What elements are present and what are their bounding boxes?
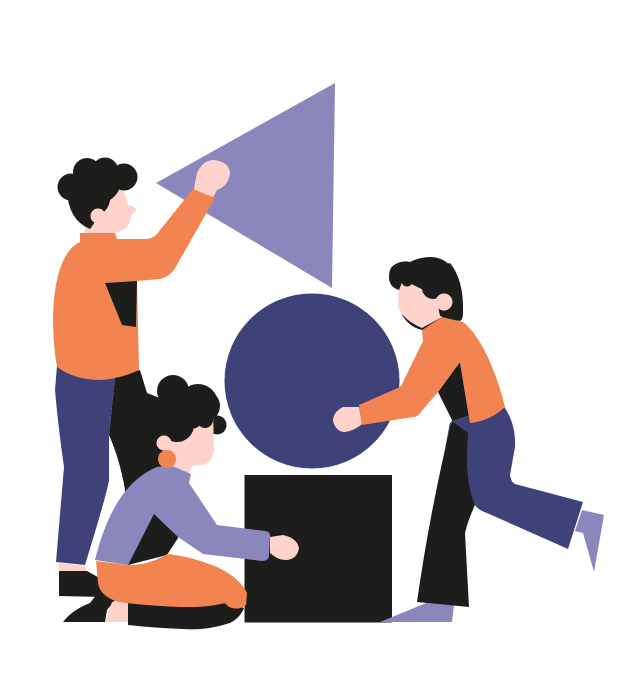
kneeling woman: black lower leg [128, 603, 244, 629]
kneeling woman: hand [270, 535, 299, 560]
man: neck and face [84, 183, 136, 240]
shape: navy circle [224, 294, 400, 468]
man: navy leg [55, 366, 115, 565]
running woman: ear [436, 294, 452, 310]
running woman: face [398, 270, 445, 328]
kneeling woman: hair [156, 375, 220, 442]
kneeling woman: back shoe [63, 590, 115, 622]
man: hand [194, 160, 230, 198]
man: ear [90, 208, 106, 224]
kneeling woman: orange skirt [96, 554, 247, 609]
kneeling woman: far hair [208, 416, 226, 434]
shape: purple triangle [156, 83, 335, 288]
running woman: orange sweater [359, 317, 505, 425]
person: running woman [333, 257, 604, 622]
running woman: back shoe [575, 510, 604, 572]
kneeling woman: foot [105, 602, 128, 622]
man: gap under arm [105, 281, 137, 327]
person: kneeling woman [63, 375, 299, 629]
man: ankle [59, 563, 87, 572]
kneeling woman: face [163, 410, 214, 474]
shape: black square [244, 475, 392, 622]
person: standing man [53, 158, 230, 597]
running woman: navy back leg [452, 400, 583, 549]
running woman: hair [389, 257, 463, 321]
running woman: black back hair [402, 263, 463, 330]
kneeling woman: ear [156, 436, 172, 450]
running woman: hand [333, 407, 362, 432]
running woman: navy sliver [417, 422, 456, 602]
man: orange sweater [53, 189, 215, 380]
man: black leg [109, 370, 178, 565]
running woman: black front leg [417, 420, 475, 607]
man: hair [58, 158, 138, 229]
running woman: black torso [438, 362, 470, 423]
kneeling woman: purple sweater [95, 465, 270, 565]
man: back shoe [59, 571, 103, 597]
running woman: front shoe [380, 603, 454, 622]
kneeling woman: earring [158, 450, 176, 468]
